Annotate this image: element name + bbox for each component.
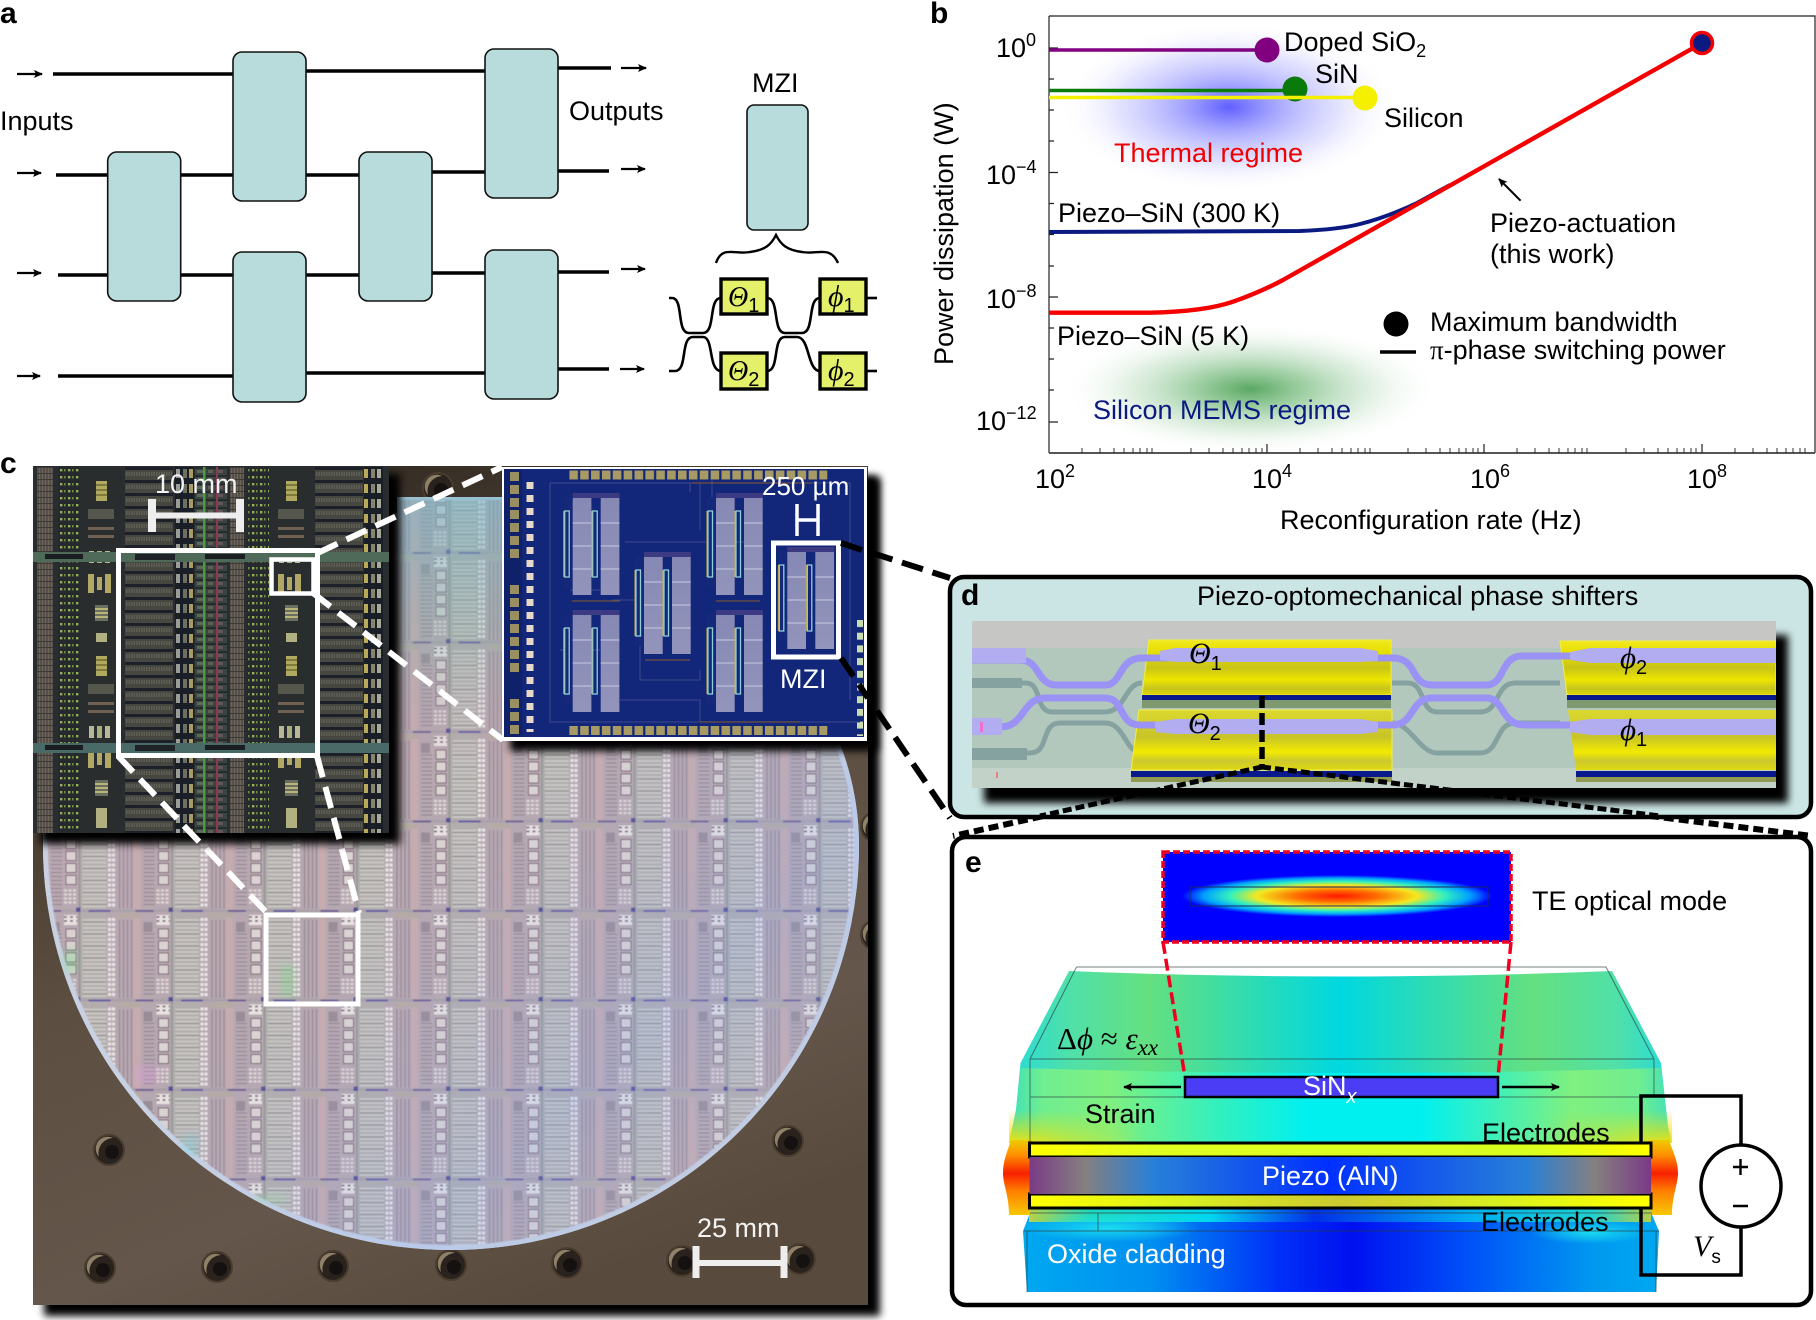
- series labels: 2: [1416, 41, 1426, 61]
- phase shifter symbols: 2: [748, 369, 759, 391]
- y tick labels: −8: [1016, 281, 1037, 301]
- outputs label: Outputs: [569, 96, 664, 126]
- panel label e: e: [965, 846, 982, 879]
- section labels: Δϕ ≈ ε: [1057, 1021, 1138, 1056]
- y tick labels: −4: [1016, 157, 1037, 177]
- MZI blocks: [108, 49, 558, 402]
- panel c: wafer photo and chip insets: [0, 447, 891, 1316]
- 25 mm scale bar: [696, 1213, 784, 1278]
- series labels: Piezo–SiN (5 K): [1057, 321, 1249, 351]
- mounting screws: [85, 473, 891, 1283]
- phase symbols: 1: [1211, 653, 1222, 675]
- panel label d: d: [961, 579, 979, 612]
- section labels: x: [1346, 1086, 1358, 1108]
- piezo layer: [1030, 1157, 1651, 1194]
- 25 mm scale bar: 25 mm: [697, 1213, 780, 1243]
- white zoom lines: [118, 756, 359, 913]
- panel e: cross section: [952, 837, 1811, 1305]
- section labels: [1047, 1021, 1610, 1269]
- chip inset: [33, 466, 389, 833]
- lower shadow waveguides: [972, 683, 1560, 753]
- chip selection rectangles: [118, 550, 318, 756]
- MZI key block: [747, 105, 808, 230]
- waveguide lines: [53, 68, 611, 376]
- SiN series: [1049, 76, 1308, 102]
- thermal regime glow: [1059, 22, 1399, 192]
- y tick labels: 10: [986, 160, 1016, 190]
- x tick labels: 8: [1717, 461, 1727, 481]
- d title: Piezo-optomechanical phase shifters: [1197, 581, 1638, 611]
- phase symbols: 2: [1210, 723, 1221, 745]
- series labels: [1057, 27, 1464, 425]
- MEMS regime glow: [1060, 323, 1440, 455]
- phase shifter symbols: 1: [844, 295, 855, 317]
- red dashed projection: [1163, 942, 1511, 1077]
- phase symbols: 1: [1636, 729, 1647, 751]
- legend: Maximum bandwidth: [1430, 307, 1678, 337]
- coupler waveguides: [669, 298, 877, 371]
- section labels: Oxide cladding: [1047, 1239, 1226, 1269]
- x tick labels: 10: [1035, 464, 1065, 494]
- series labels: SiN: [1315, 59, 1359, 89]
- optical mode plot: [1163, 852, 1511, 942]
- phase symbols: Θ: [1189, 637, 1211, 670]
- laser dots: [980, 722, 983, 732]
- d frame: [950, 577, 1811, 817]
- series labels: Piezo–SiN (300 K): [1058, 198, 1280, 228]
- blue chip shadow: [510, 476, 878, 751]
- black dashed connectors between panels c, d and e: [841, 543, 1812, 836]
- doped SiO2 series: [1049, 38, 1280, 62]
- y tick labels: −12: [1006, 403, 1037, 423]
- voltage source circuit: V: [1693, 1230, 1711, 1263]
- y tick labels: 10: [996, 33, 1026, 63]
- 10 mm scale bar: [152, 469, 240, 532]
- purple waveguides: [972, 656, 1580, 727]
- rainbow glints along wafer rim: [64, 950, 294, 1203]
- series labels: Thermal regime: [1114, 138, 1303, 168]
- phase symbols: [1188, 637, 1647, 751]
- yellow electrodes: [1142, 640, 1391, 695]
- section labels: Strain: [1085, 1099, 1156, 1129]
- wafer: [40, 490, 865, 1260]
- blue chip labels: 250 µm: [762, 471, 849, 501]
- piezo-actuation annotation: Piezo-actuation: [1490, 208, 1676, 238]
- render shadow: [984, 635, 1788, 803]
- output arrows: [620, 68, 646, 369]
- series labels: Silicon: [1384, 103, 1464, 133]
- max bandwidth marker: [1692, 32, 1712, 54]
- y tick labels: 10: [976, 406, 1006, 436]
- phase shifter symbols: ϕ: [828, 354, 844, 387]
- MZI label: MZI: [752, 68, 798, 98]
- electrode layers: [1030, 1143, 1651, 1208]
- section labels: Electrodes: [1481, 1207, 1609, 1237]
- piezo-actuation annotation: (this work): [1490, 239, 1615, 269]
- phase shifter render: [972, 621, 1776, 788]
- panel label c: c: [0, 447, 17, 480]
- panel b: power dissipation chart: [929, 0, 1815, 535]
- photo background: [33, 466, 868, 1305]
- series labels: Doped SiO: [1284, 27, 1416, 57]
- phase shifter boxes: [721, 279, 866, 389]
- blue chip labels: MZI: [780, 664, 826, 694]
- y tick labels: 0: [1026, 30, 1036, 50]
- phase shifter symbols: 1: [748, 295, 759, 317]
- x axis title: Reconfiguration rate (Hz): [1280, 505, 1582, 535]
- plot frame and ticks: [1049, 16, 1815, 453]
- phase symbols: ϕ: [1620, 640, 1636, 675]
- section labels: SiN: [1303, 1071, 1347, 1101]
- x tick labels: 4: [1282, 461, 1292, 481]
- section labels: Piezo (AlN): [1262, 1161, 1399, 1191]
- piezo-actuation annotation: [1490, 179, 1676, 269]
- y tick labels: 10: [986, 284, 1016, 314]
- photo shadow: [44, 478, 880, 1316]
- legend: [1380, 307, 1726, 365]
- strain arrows: [1124, 1086, 1559, 1088]
- phase shifter symbols: ϕ: [828, 280, 844, 313]
- brace: [716, 235, 838, 263]
- phase shifter symbols: Θ: [728, 282, 748, 313]
- voltage source circuit: s: [1711, 1247, 1721, 1268]
- Piezo-SiN 5 K curve: [1049, 43, 1702, 313]
- 10 mm scale bar: 10 mm: [155, 469, 238, 499]
- legend: π-phase switching power: [1430, 335, 1726, 365]
- phase symbols: 2: [1636, 657, 1647, 679]
- e frame: [952, 837, 1811, 1305]
- silicon series: [1049, 86, 1378, 110]
- cut fan dashes: [1040, 767, 1660, 816]
- wafer selection rectangle: [266, 915, 358, 1004]
- panel a: MZI mesh schematic: [0, 0, 877, 402]
- input arrows: [17, 74, 42, 376]
- section labels: xx: [1137, 1035, 1159, 1060]
- strain field simulation: [1003, 967, 1678, 1292]
- x tick labels: 10: [1252, 464, 1282, 494]
- blue chip labels: [762, 471, 849, 694]
- panel d: piezo-optomechanical phase shifters: [950, 577, 1811, 817]
- series labels: Silicon MEMS regime: [1093, 395, 1351, 425]
- section labels: Electrodes: [1482, 1118, 1610, 1148]
- cut line: [1259, 696, 1265, 767]
- x tick labels: 10: [1470, 464, 1500, 494]
- phase symbols: ϕ: [1620, 712, 1636, 747]
- blue chip inset: [502, 467, 867, 741]
- SiNx waveguide: [1185, 1077, 1498, 1097]
- phase shifter symbols: [728, 280, 855, 391]
- phase symbols: Θ: [1188, 707, 1210, 740]
- inputs label: Inputs: [0, 106, 74, 136]
- voltage source circuit: [1641, 1096, 1781, 1275]
- y axis title: Power dissipation (W): [929, 102, 959, 365]
- phase shifter symbols: Θ: [728, 356, 748, 387]
- y tick labels: [976, 30, 1037, 436]
- x tick labels: [1035, 461, 1727, 494]
- black dash ends on inset: [841, 543, 868, 698]
- x tick labels: 2: [1065, 461, 1075, 481]
- x tick labels: 10: [1687, 464, 1717, 494]
- mode caption: TE optical mode: [1532, 886, 1727, 916]
- phase shifter symbols: 2: [844, 369, 855, 391]
- Piezo-SiN 300 K curve: [1049, 185, 1450, 232]
- chip inset shadow: [40, 474, 400, 844]
- white zoom lines to blue chip: [118, 467, 503, 848]
- x tick labels: 6: [1500, 461, 1510, 481]
